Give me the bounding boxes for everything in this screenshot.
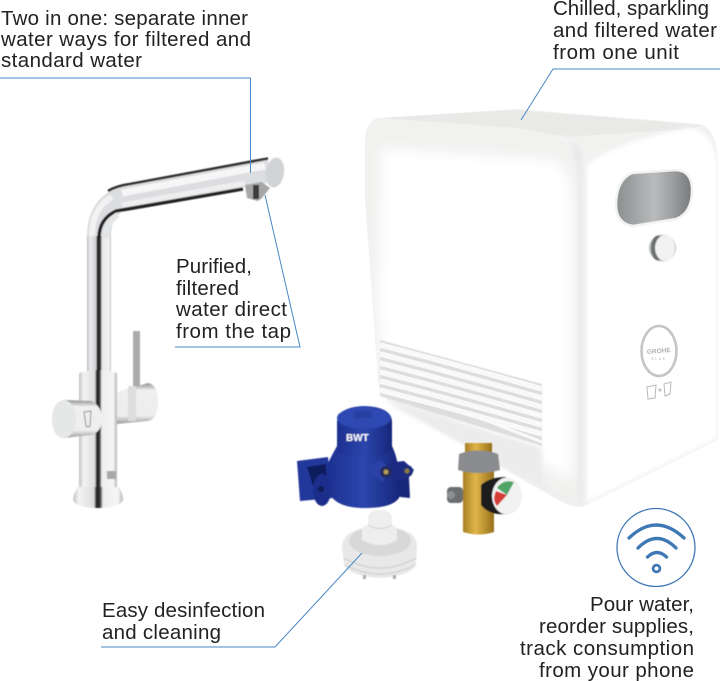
callout: chilled bbox=[521, 0, 720, 120]
valve top bbox=[465, 443, 492, 455]
filtration unit bbox=[365, 109, 718, 507]
unit right side bbox=[586, 128, 717, 503]
unit button bbox=[649, 234, 676, 262]
valve nut bbox=[458, 450, 500, 473]
filter cap bbox=[337, 406, 392, 457]
faucet body bbox=[79, 370, 117, 487]
blue filter head bbox=[297, 406, 414, 508]
callout: cleaning bbox=[101, 553, 362, 647]
pressure gauge bbox=[481, 477, 508, 514]
unit window bbox=[616, 170, 692, 226]
valve brass body bbox=[463, 470, 494, 534]
callout: phone: reorder supplies, bbox=[539, 615, 694, 638]
filter logo: BWT bbox=[346, 433, 369, 444]
callout: phone: Pour water, bbox=[590, 593, 694, 616]
callout: phone bbox=[520, 593, 694, 681]
faucet right handle bbox=[117, 383, 158, 424]
callout: purified: Purified, bbox=[176, 255, 252, 278]
filter knob bbox=[313, 474, 331, 506]
white plug bbox=[342, 510, 417, 579]
faucet base bbox=[73, 487, 123, 508]
filter ports bbox=[366, 460, 414, 498]
callout: purified: water direct bbox=[175, 298, 287, 321]
unit lower face bbox=[382, 400, 578, 505]
callout: two in one: Two in one: separate inner bbox=[1, 7, 248, 30]
pressure valve bbox=[447, 443, 522, 534]
faucet lever bbox=[133, 331, 140, 388]
callout: purified: filtered bbox=[176, 277, 239, 300]
unit front panel bbox=[378, 148, 572, 480]
callout: phone: track consumption bbox=[520, 637, 694, 660]
callout: chilled: and filtered water bbox=[553, 19, 717, 42]
filter body bbox=[327, 446, 400, 508]
faucet aerator bbox=[245, 182, 270, 201]
faucet logo bbox=[107, 471, 116, 479]
callout: cleaning: and cleaning bbox=[102, 621, 221, 644]
faucet spout bbox=[92, 158, 270, 238]
callout: cleaning: Easy desinfection bbox=[102, 599, 265, 622]
unit vent grille bbox=[380, 340, 542, 446]
valve side fitting bbox=[447, 487, 463, 503]
filter bracket bbox=[297, 457, 333, 501]
callout: purified bbox=[175, 195, 300, 347]
faucet column bbox=[87, 234, 111, 372]
callout: purified: from the tap bbox=[176, 320, 291, 343]
unit crease bbox=[558, 136, 586, 505]
callout: two in one: standard water bbox=[1, 49, 142, 72]
faucet left handle bbox=[52, 400, 102, 438]
callout: two in one bbox=[0, 7, 251, 173]
callout: chilled: from one unit bbox=[553, 41, 679, 64]
unit logo ring bbox=[642, 326, 676, 376]
callout: two in one: water ways for filtered and bbox=[0, 28, 251, 51]
unit silhouette bbox=[365, 109, 718, 507]
unit logo ring: BLUE bbox=[651, 357, 667, 361]
unit logo ring: GROHE bbox=[647, 347, 672, 356]
unit top bbox=[380, 110, 699, 137]
icon: wifi bbox=[617, 508, 695, 586]
faucet spout end bbox=[264, 156, 286, 189]
unit glass icons bbox=[647, 382, 671, 399]
faucet bbox=[52, 156, 286, 508]
